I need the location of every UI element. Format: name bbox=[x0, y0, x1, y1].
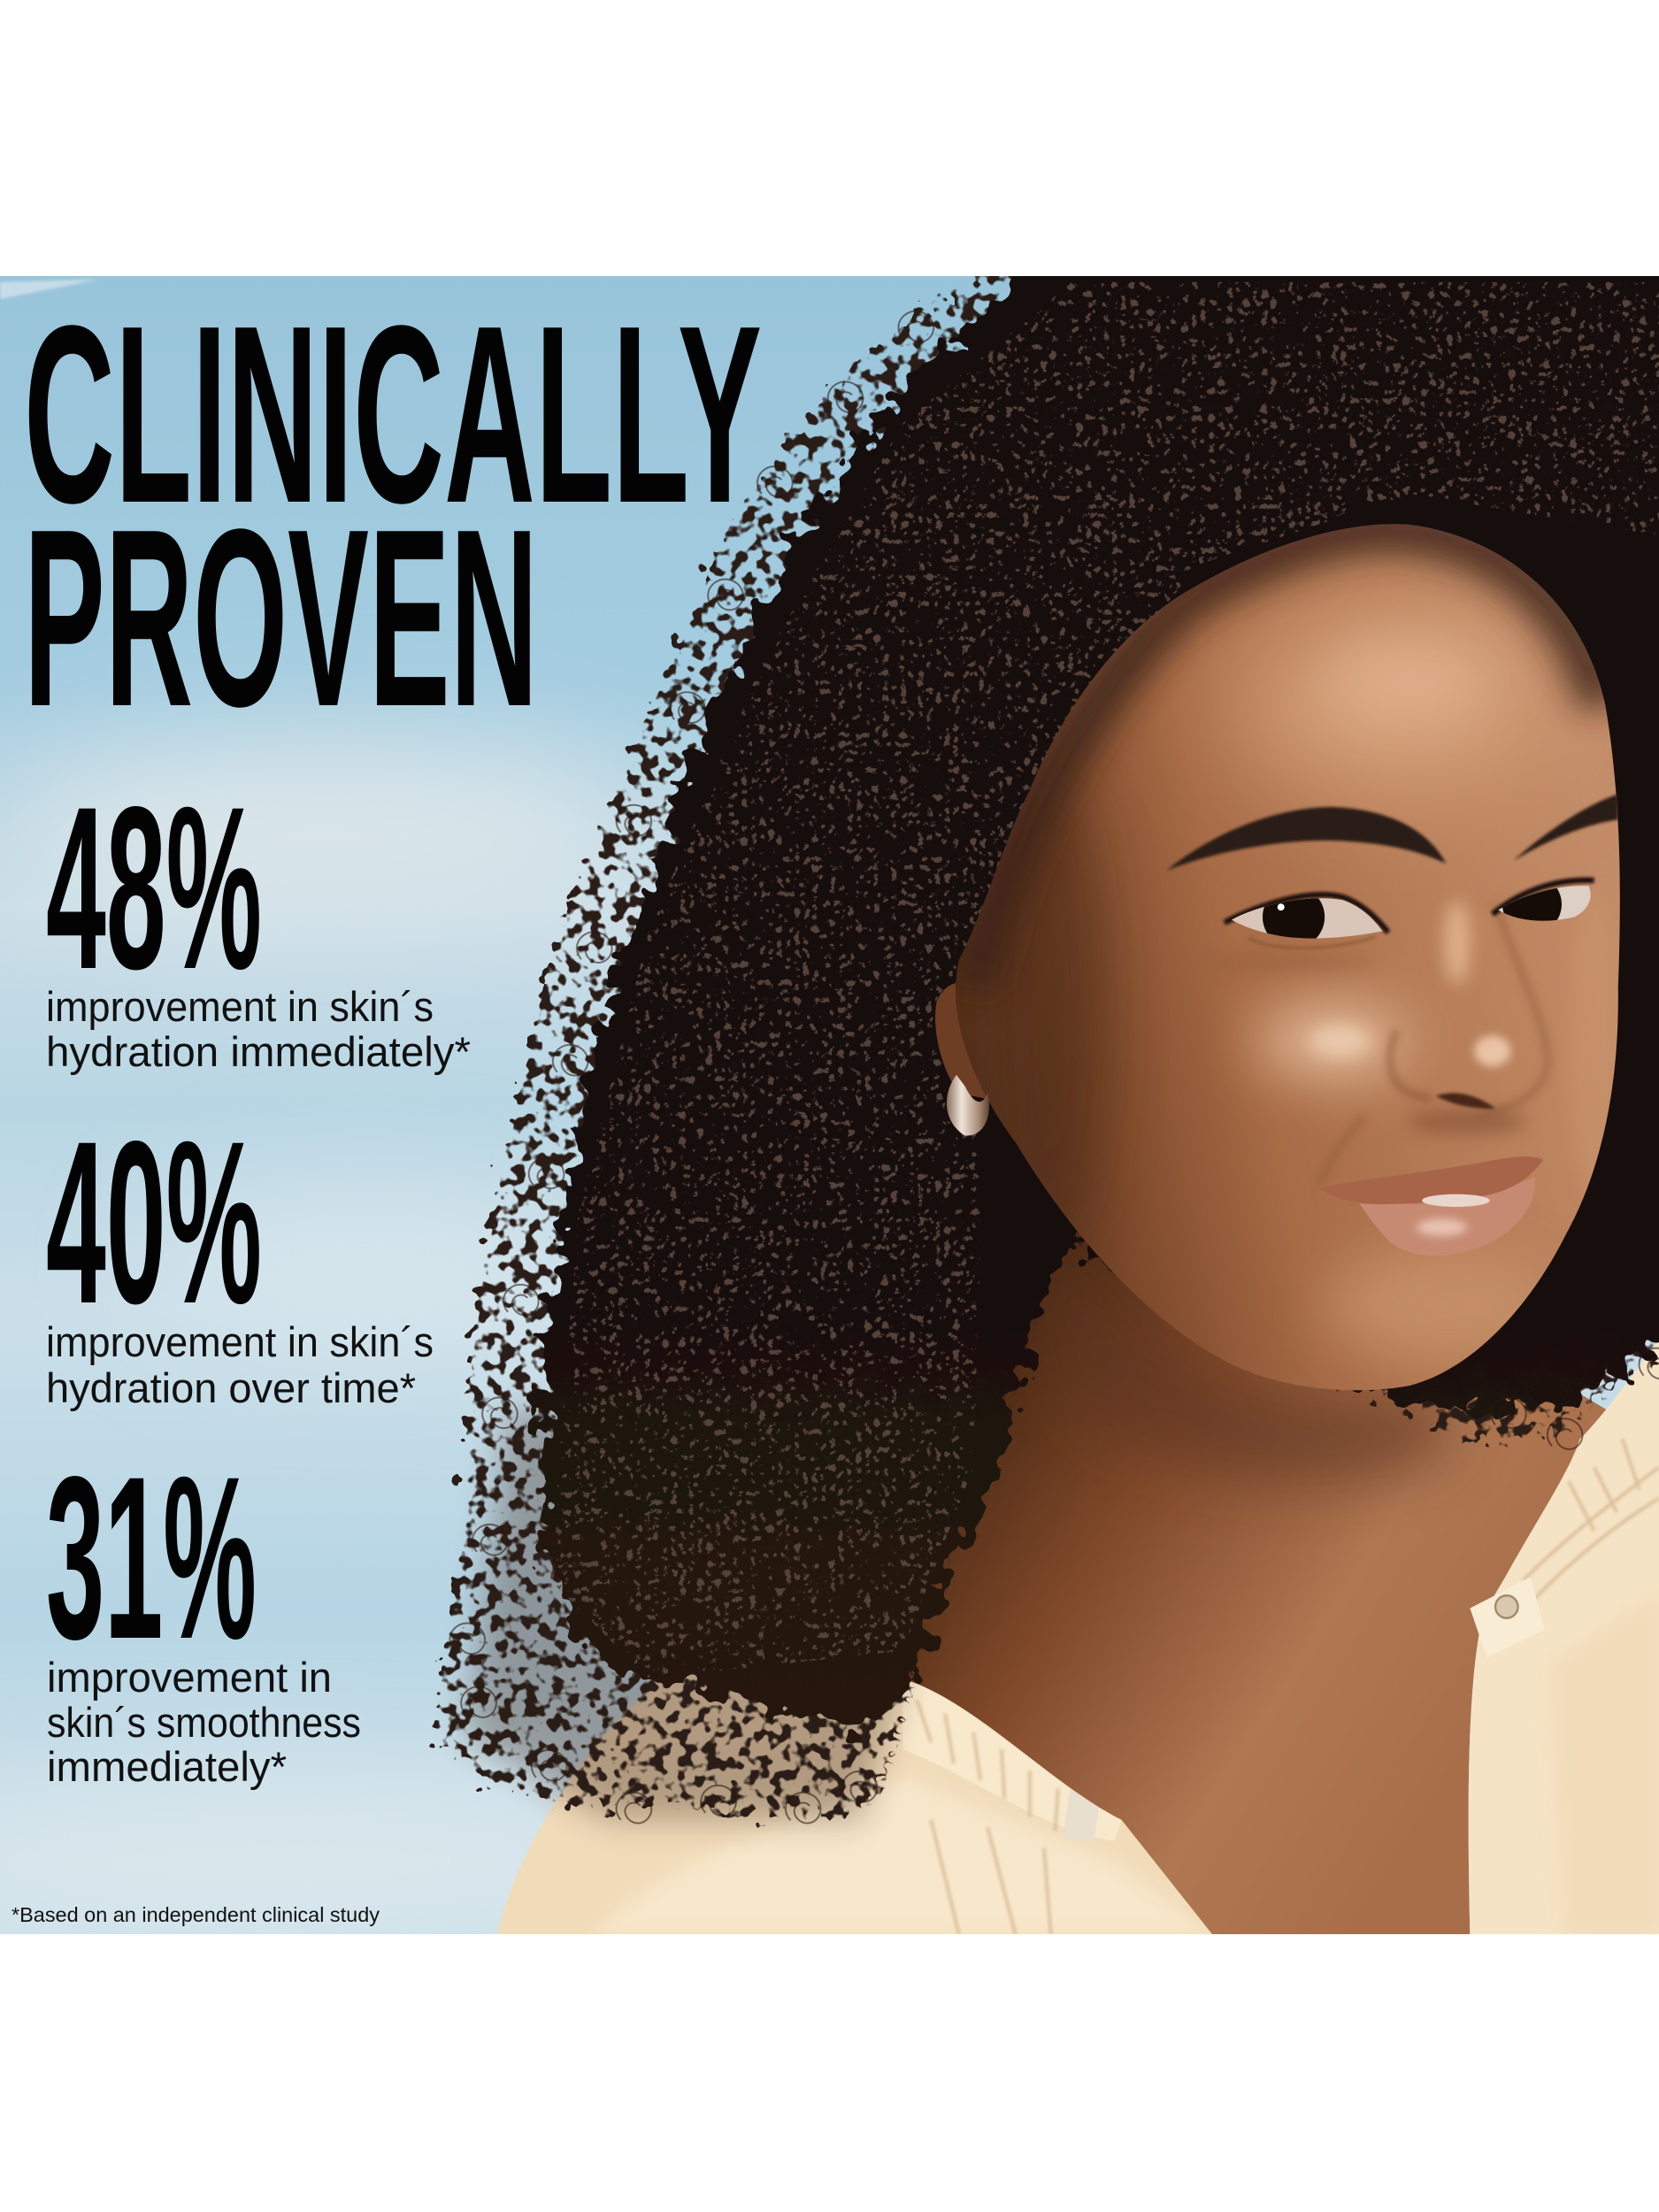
earring bbox=[947, 1075, 989, 1136]
stat: 48 percent: hydration immediately* bbox=[46, 1028, 471, 1075]
right eyebrow bbox=[1514, 795, 1618, 861]
stat: 31 percent: immediately* bbox=[47, 1743, 287, 1790]
skin highlights and shading bbox=[973, 529, 1619, 1362]
photo: woman against sky bbox=[0, 211, 1659, 1947]
lips bbox=[1319, 1156, 1543, 1256]
hair strand highlights bbox=[550, 282, 1659, 1678]
right eye bbox=[1488, 868, 1609, 938]
neck and chest bbox=[909, 1232, 1607, 1934]
hair outer frizz bbox=[440, 211, 1659, 1816]
title: clinically proven: PROVEN bbox=[24, 476, 538, 759]
blouse: right side bbox=[1469, 1340, 1659, 1936]
stat: 31 percent: improvement in bbox=[47, 1654, 332, 1701]
blouse: left side bbox=[497, 1674, 1212, 1934]
hair solid mass bbox=[541, 211, 1659, 1728]
stat: 40 percent: hydration over time* bbox=[46, 1364, 416, 1411]
stat: 31 percent: 31% bbox=[46, 1428, 257, 1687]
stat: 40 percent: improvement in skin´s bbox=[46, 1318, 434, 1365]
ear bbox=[935, 982, 995, 1101]
left eyebrow bbox=[1167, 807, 1446, 871]
stat: 48 percent: improvement in skin´s bbox=[46, 983, 434, 1030]
neck shadow under chin bbox=[1115, 1353, 1469, 1505]
footnote: *Based on an independent clinical study bbox=[12, 1903, 380, 1926]
title: clinically proven bbox=[24, 273, 762, 759]
hair haze bbox=[465, 1410, 917, 1820]
stat: 40 percent: 40% bbox=[46, 1093, 262, 1352]
face bbox=[956, 524, 1620, 1390]
sky background bbox=[0, 268, 1659, 1947]
stat: 31 percent bbox=[46, 1428, 361, 1790]
stat: 31 percent: skin´s smoothness bbox=[47, 1699, 361, 1746]
stat: 48 percent: 48% bbox=[46, 758, 262, 1018]
nose bbox=[1319, 1030, 1495, 1185]
hair bbox=[440, 211, 1659, 1824]
left eye bbox=[1213, 881, 1389, 952]
loose curls at hair edge bbox=[449, 311, 1659, 1824]
text: CLINICALLY bbox=[24, 273, 762, 556]
